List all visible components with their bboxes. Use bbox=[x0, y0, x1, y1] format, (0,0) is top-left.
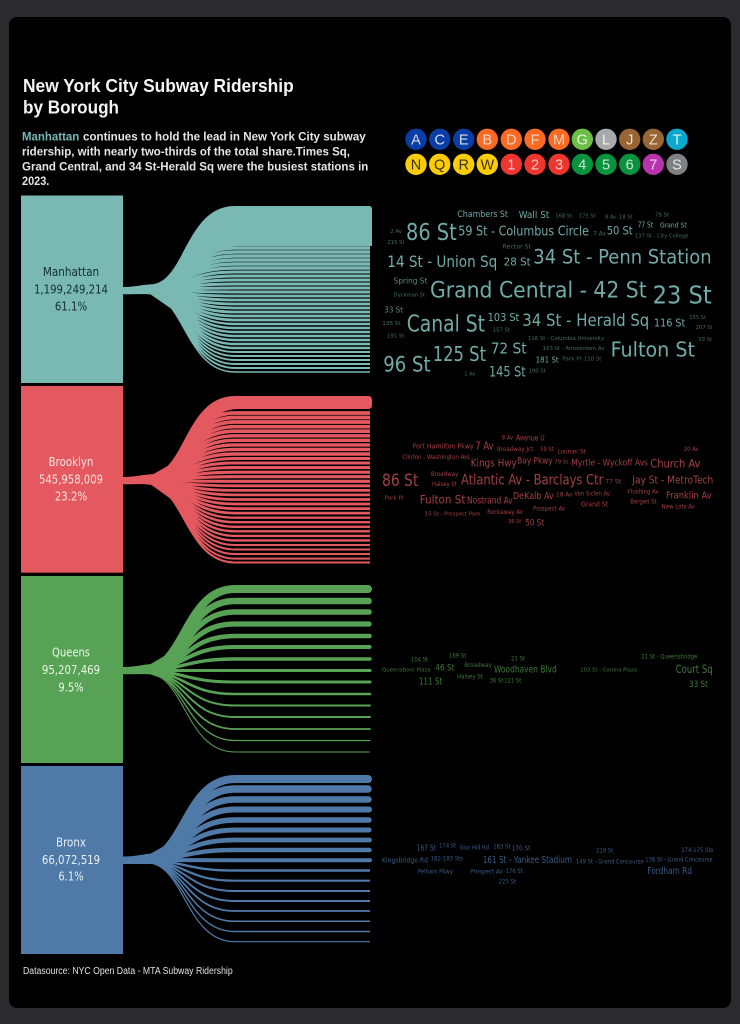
word cloud: Manhattan stations: 7 Av bbox=[593, 230, 606, 237]
word cloud: Brooklyn stations: Prospect Av bbox=[533, 505, 566, 512]
word cloud: Bronx stations: 161 St - Yankee Stadium bbox=[483, 855, 572, 866]
bar label: Queens: 95,207,469 bbox=[42, 663, 100, 677]
subway line badges legend: E bbox=[459, 132, 469, 148]
word cloud: Manhattan stations: 215 St bbox=[387, 240, 405, 246]
word cloud: Brooklyn stations: Atlantic Av - Barclays Ctr bbox=[461, 472, 604, 488]
subway line badges legend: T bbox=[673, 132, 682, 148]
word cloud: Bronx stations: 174-175 Sts bbox=[681, 847, 713, 854]
word cloud: Manhattan stations: 2 Av bbox=[390, 229, 402, 235]
word cloud: Queens stations: 111 St bbox=[419, 676, 443, 687]
word cloud: Brooklyn stations bbox=[382, 434, 713, 529]
word cloud: Queens stations: Woodhaven Blvd bbox=[494, 665, 557, 676]
subway line badges legend: 4 bbox=[578, 158, 586, 174]
subway line badges legend: B bbox=[482, 132, 492, 148]
word cloud: Brooklyn stations: 79 St bbox=[554, 459, 568, 465]
word cloud: Manhattan stations: 86 St bbox=[406, 220, 457, 246]
word cloud: Brooklyn stations: Franklin Av bbox=[666, 490, 712, 501]
word cloud: Manhattan stations: Park Pl bbox=[562, 357, 581, 363]
bar label: Manhattan: 61.1% bbox=[55, 299, 87, 313]
word cloud: Brooklyn stations: Bay Pkwy bbox=[517, 456, 553, 466]
bar label: Manhattan bbox=[34, 265, 108, 313]
bar label: Queens bbox=[42, 646, 100, 694]
word cloud: Queens stations: 21 St - Queensbridge bbox=[641, 653, 698, 660]
bar label: Brooklyn bbox=[39, 455, 103, 503]
word cloud: Manhattan stations: 77 St bbox=[638, 220, 653, 229]
bar label: Bronx bbox=[42, 836, 100, 884]
word cloud: Bronx stations: 174 St bbox=[439, 843, 456, 850]
word cloud: Queens stations: 33 St bbox=[689, 680, 708, 690]
word cloud: Manhattan stations: Spring St bbox=[394, 276, 428, 285]
word cloud: Brooklyn stations: Avenue U bbox=[516, 434, 545, 443]
word cloud: Brooklyn stations: Fulton St bbox=[420, 492, 465, 506]
word cloud: Manhattan stations bbox=[382, 210, 713, 381]
subway line badges legend: 6 bbox=[626, 158, 634, 174]
word cloud: Bronx stations: 170 St bbox=[512, 844, 531, 852]
word cloud: Manhattan stations: Grand Central - 42 St bbox=[430, 279, 647, 304]
word cloud: Queens stations: 121 St bbox=[504, 678, 521, 685]
subway line badges legend: 3 bbox=[555, 158, 563, 174]
word cloud: Brooklyn stations: 8 Av bbox=[502, 434, 514, 441]
word cloud: Manhattan stations: 181 St bbox=[536, 356, 559, 365]
subway line badges legend: 1 bbox=[507, 158, 515, 174]
word cloud: Manhattan stations: 59 St bbox=[698, 337, 712, 343]
word cloud: Manhattan stations: 23 St bbox=[653, 280, 712, 309]
subway line badges legend: D bbox=[506, 132, 517, 148]
subway line badges legend: J bbox=[626, 132, 633, 148]
data source note: Datasource: NYC Open Data - MTA Subway Ridership bbox=[23, 966, 233, 977]
word cloud: Bronx stations: Gun Hill Rd bbox=[460, 845, 489, 852]
word cloud: Manhattan stations: 14 St - Union Sq bbox=[387, 252, 497, 271]
word cloud: Brooklyn stations: Broadway Jct bbox=[497, 446, 533, 453]
word cloud: Bronx stations: 176 St bbox=[506, 868, 523, 875]
word cloud: Manhattan stations: 1 Av bbox=[464, 371, 476, 377]
subway line badges legend: S bbox=[672, 158, 682, 174]
subway line badges legend: 2 bbox=[531, 158, 539, 174]
word cloud: Manhattan stations: Dyckman St bbox=[394, 292, 425, 298]
word cloud: Manhattan stations: 175 St bbox=[579, 213, 596, 219]
word cloud: Brooklyn stations: Myrtle - Wyckoff Avs bbox=[571, 459, 648, 469]
sankey flow: Manhattan bbox=[123, 206, 372, 372]
word cloud: Bronx stations bbox=[382, 843, 713, 886]
word cloud: Brooklyn stations: 77 St bbox=[605, 478, 621, 485]
bar label: Brooklyn: Brooklyn bbox=[49, 455, 93, 469]
word cloud: Brooklyn stations: 20 Av bbox=[684, 446, 699, 453]
word cloud: Brooklyn stations: Halsey St bbox=[432, 481, 457, 488]
word cloud: Bronx stations: 225 St bbox=[499, 879, 516, 886]
word cloud: Brooklyn stations: Flushing Av bbox=[628, 489, 660, 496]
bar label: Manhattan: 1,199,249,214 bbox=[34, 283, 108, 297]
intro text block: 2023. bbox=[22, 174, 49, 188]
word cloud: Brooklyn stations: 59 St bbox=[540, 446, 554, 453]
word cloud: Bronx stations: Fordham Rd bbox=[647, 866, 692, 877]
bar label: Bronx: 6.1% bbox=[58, 870, 84, 884]
word cloud: Bronx stations: Kingsbridge Rd bbox=[382, 857, 428, 865]
bar: Brooklyn bbox=[21, 386, 123, 573]
word cloud: Queens stations bbox=[382, 653, 713, 690]
word cloud: Manhattan stations: 96 St bbox=[383, 353, 431, 377]
word cloud: Queens stations: 103 St - Corona Plaza bbox=[580, 668, 637, 674]
word cloud: Manhattan stations: 72 St bbox=[491, 340, 527, 358]
bar label: Bronx: Bronx bbox=[56, 836, 87, 850]
word cloud: Manhattan stations: 116 St - Columbia University bbox=[528, 336, 604, 342]
subway line badges legend: A bbox=[411, 132, 421, 148]
title: by Borough bbox=[23, 98, 119, 118]
word cloud: Manhattan stations: Chambers St bbox=[457, 210, 508, 220]
word cloud: Brooklyn stations: 36 St bbox=[508, 519, 521, 525]
word cloud: Manhattan stations: 135 St bbox=[382, 321, 401, 327]
intro text block bbox=[22, 130, 368, 188]
word cloud: Queens stations: 104 St bbox=[411, 657, 428, 664]
word cloud: Bronx stations: 167 St bbox=[417, 843, 436, 852]
word cloud: Bronx stations: 183 St bbox=[493, 843, 511, 850]
subway line badges legend: M bbox=[553, 132, 565, 148]
word cloud: Brooklyn stations: Bergen St bbox=[630, 499, 657, 506]
word cloud: Manhattan stations: 207 St bbox=[696, 325, 713, 331]
word cloud: Brooklyn stations: Nostrand Av bbox=[467, 495, 513, 506]
word cloud: Bronx stations: 149 St - Grand Concourse bbox=[576, 859, 644, 866]
word cloud: Brooklyn stations: DeKalb Av bbox=[513, 491, 554, 502]
word cloud: Queens stations: 21 St bbox=[511, 655, 525, 662]
bar label: Queens: Queens bbox=[52, 646, 90, 660]
word cloud: Bronx stations: 182-183 Sts bbox=[431, 856, 463, 863]
word cloud: Manhattan stations: 8 Av bbox=[605, 214, 616, 220]
subway line badges legend: L bbox=[602, 132, 610, 148]
word cloud: Manhattan stations: 116 St bbox=[654, 318, 686, 330]
word cloud: Manhattan stations: 190 St bbox=[529, 368, 546, 374]
word cloud: Manhattan stations: 28 St bbox=[504, 257, 531, 269]
subway line badges legend: F bbox=[531, 132, 540, 148]
bar label: Brooklyn: 545,958,009 bbox=[39, 473, 103, 487]
word cloud: Brooklyn stations: Broadway bbox=[431, 471, 459, 478]
word cloud: Brooklyn stations: 18 Av bbox=[556, 491, 573, 499]
word cloud: Brooklyn stations: 50 St bbox=[525, 519, 544, 529]
title bbox=[23, 76, 294, 118]
sankey flow: Bronx bbox=[123, 779, 370, 942]
word cloud: Bronx stations: 219 St bbox=[596, 847, 613, 854]
word cloud: Manhattan stations: 33 St bbox=[384, 305, 403, 314]
word cloud: Manhattan stations: 168 St bbox=[555, 213, 572, 219]
word cloud: Brooklyn stations: Kings Hwy bbox=[471, 458, 517, 470]
word cloud: Brooklyn stations: Lorimer St bbox=[558, 448, 586, 455]
bar label: Manhattan: Manhattan bbox=[43, 265, 99, 279]
word cloud: Manhattan stations: 155 St bbox=[689, 315, 706, 321]
bar: Queens bbox=[21, 576, 123, 763]
subway line badges legend: Z bbox=[649, 132, 658, 148]
word cloud: Manhattan stations: Grand St bbox=[660, 221, 687, 229]
word cloud: Brooklyn stations: Church Av bbox=[650, 456, 700, 470]
word cloud: Bronx stations: 138 St - Grand Concourse bbox=[645, 857, 713, 864]
word cloud: Manhattan stations: 191 St bbox=[387, 333, 404, 339]
word cloud: Brooklyn stations: 7 Av bbox=[475, 440, 494, 452]
intro text block: Manhattan bbox=[22, 130, 79, 144]
subway line badges legend: N bbox=[411, 158, 421, 174]
title: New York City Subway Ridership bbox=[23, 76, 294, 96]
word cloud: Queens stations: 46 St bbox=[435, 663, 455, 673]
word cloud: Brooklyn stations: Fort Hamilton Pkwy bbox=[413, 443, 474, 451]
word cloud: Bronx stations: Prospect Av bbox=[470, 868, 503, 875]
intro text block: ridership, with nearly two-thirds of the total share.Times Sq, bbox=[22, 145, 350, 159]
word cloud: Brooklyn stations: Grand St bbox=[581, 501, 609, 509]
subway line badges legend: Q bbox=[434, 158, 445, 174]
word cloud: Manhattan stations: 34 St - Penn Station bbox=[533, 245, 712, 268]
intro text block: continues to hold the lead in New York City subway bbox=[83, 130, 366, 144]
word cloud: Manhattan stations: 34 St - Herald Sq bbox=[522, 311, 649, 330]
word cloud: Bronx stations: Pelham Pkwy bbox=[418, 868, 454, 875]
word cloud: Manhattan stations: 157 St bbox=[493, 328, 510, 334]
word cloud: Queens stations: Queensboro Plaza bbox=[382, 668, 431, 674]
word cloud: Manhattan stations: 103 St bbox=[488, 312, 520, 324]
word cloud: Queens stations: 169 St bbox=[449, 653, 466, 660]
word cloud: Manhattan stations: 137 St - City College bbox=[635, 234, 688, 240]
word cloud: Queens stations: Court Sq bbox=[676, 662, 713, 676]
sankey flow: Queens bbox=[123, 589, 370, 752]
subway line badges legend bbox=[405, 129, 688, 175]
bar label: Brooklyn: 23.2% bbox=[55, 489, 87, 503]
word cloud: Brooklyn stations: 15 St - Prospect Park bbox=[425, 512, 481, 518]
bar: Manhattan bbox=[21, 196, 123, 383]
word cloud: Queens stations: Halsey St bbox=[457, 674, 483, 681]
subway line badges legend: R bbox=[458, 158, 469, 174]
subway line badges legend: C bbox=[434, 132, 445, 148]
word cloud: Manhattan stations: 163 St - Amsterdam Av bbox=[543, 346, 604, 352]
word cloud: Manhattan stations: 125 St bbox=[433, 342, 486, 366]
word cloud: Brooklyn stations: 86 St bbox=[382, 471, 418, 491]
word cloud: Manhattan stations: Canal St bbox=[407, 312, 485, 338]
word cloud: Queens stations: 36 St bbox=[490, 678, 503, 685]
word cloud: Brooklyn stations: Jay St - MetroTech bbox=[631, 475, 713, 487]
word cloud: Manhattan stations: Rector St bbox=[503, 244, 531, 251]
subway line badges legend: W bbox=[480, 158, 494, 174]
word cloud: Brooklyn stations: Park Pl bbox=[385, 496, 403, 502]
bar label: Queens: 9.5% bbox=[58, 680, 84, 694]
intro text block: Grand Central, and 34 St-Herald Sq were the busiest stations in bbox=[22, 159, 368, 173]
subway line badges legend: 5 bbox=[602, 158, 610, 174]
bar: Bronx bbox=[21, 766, 123, 954]
bar label: Bronx: 66,072,519 bbox=[42, 853, 100, 867]
word cloud: Manhattan stations: Wall St bbox=[519, 210, 550, 221]
word cloud: Brooklyn stations: Rockaway Av bbox=[487, 509, 524, 516]
word cloud: Queens stations: Broadway bbox=[464, 662, 493, 669]
word cloud: Manhattan stations: 59 St - Columbus Circle bbox=[458, 224, 589, 240]
word cloud: Manhattan stations: 79 St bbox=[655, 212, 669, 218]
word cloud: Brooklyn stations: New Lots Av bbox=[662, 503, 695, 510]
word cloud: Manhattan stations: 145 St bbox=[489, 365, 526, 381]
word cloud: Manhattan stations: 18 St bbox=[619, 214, 633, 220]
word cloud: Manhattan stations: 110 St bbox=[584, 357, 601, 363]
subway line badges legend: 7 bbox=[649, 158, 657, 174]
word cloud: Brooklyn stations: Clinton - Washington Avs bbox=[402, 454, 470, 461]
word cloud: Manhattan stations: Fulton St bbox=[611, 338, 695, 362]
sankey flow: Brooklyn bbox=[123, 396, 372, 562]
subway line badges legend: G bbox=[577, 132, 588, 148]
word cloud: Manhattan stations: 50 St bbox=[607, 224, 633, 238]
word cloud: Brooklyn stations: Van Siclen Av bbox=[574, 491, 611, 498]
